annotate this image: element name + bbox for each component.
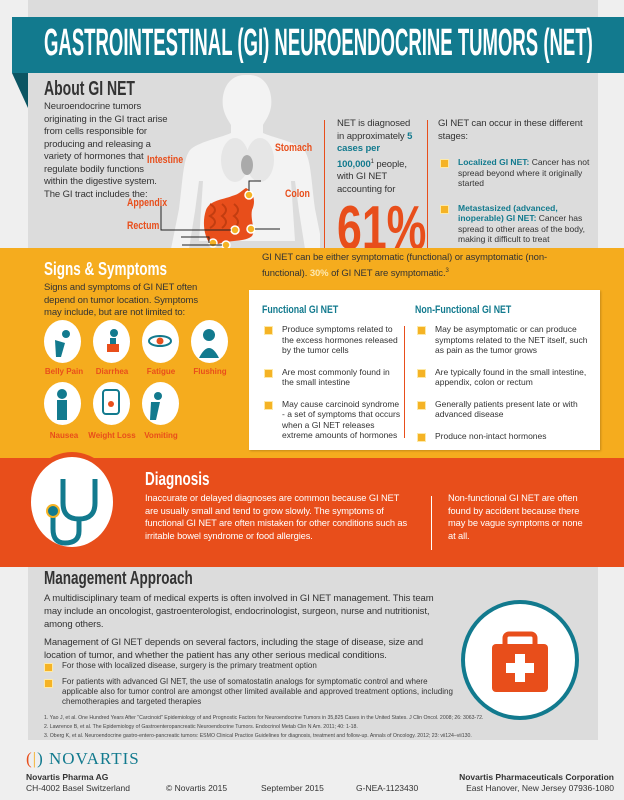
heading: about: About GI NET [44,78,135,100]
organ labels: Appendix [127,197,167,209]
footer: East Hanover, New Jersey 07936-1080 [466,783,614,793]
symptom icons: Belly Pain [45,367,83,376]
title banner [12,17,624,73]
divider lines [324,120,325,272]
references: 3. Oberg K, et al. Neuroendocrine gastro-entero-pancreatic tumors: ESMO Clinical Practice Guidelines for diagnosis, treatment and follow-up. Annals of Oncology. 2012; 23: vii124–vii130. [44,733,472,739]
column: functional [262,304,400,440]
footer: September 2015 [261,783,324,793]
heading: signs: Signs & Symptoms [44,259,167,279]
references [44,715,484,739]
references: 2. Lawrence B, et al. The Epidemiology of Gastroenteropancreatic Neuroendocrine Tumors. Endocrinol Metab Clin N Am. 2011; 40: 1-18. [44,724,358,730]
column: functional: May cause carcinoid syndrome - a set of symptoms that occurs when a GI NET releases extreme amounts of hormones [282,398,400,440]
organ labels [127,142,312,232]
stages: Metastasized (advanced, inoperable) GI NET: Cancer has spread to other areas of the body, making it difficult to treat [458,202,585,244]
column: functional: Functional GI NET [262,304,338,316]
panel: functional vs non-functional [249,290,600,450]
management bullets: For patients with advanced GI NET, the use of somatostatin analogs for symptomatic control and where applicable also for tumor control are amongst other limited available and approved treatment options, including chemotherapies and targeted therapies [62,677,453,706]
symptom icons: Nausea [50,431,78,440]
column: non-functional: Are typically found in the small intestine, appendix, colon or rectum [435,366,586,387]
symptom icons: Flushing [193,367,227,376]
stat: 61%: of NET diagnoses.2 [337,265,417,276]
organ labels: Intestine [147,154,183,166]
footer: Novartis Pharma AG [26,772,108,782]
organ labels: Rectum [127,220,159,232]
footer: Novartis Pharmaceuticals Corporation [459,772,614,782]
text: signs: Signs and symptoms of GI NET often depend on tumor location. Symptoms may include, but are not limited to: [44,282,198,318]
column: functional: Produce symptoms related to the excess hormones released by the tumor cells [282,324,398,355]
references: 1. Yao J, et al. One Hundred Years After "Carcinoid" Epidemiology of and Prognostic Factors for Neuroendocrine Tumors in 35,825 Cases in the United States. J Clin Oncol. 2008; 26: 3063-72. [44,715,484,721]
footer: G-NEA-1123430 [356,783,418,793]
title banner: GASTROINTESTINAL (GI) NEUROENDOCRINE TUMORS (NET) [44,22,593,64]
heading: diagnosis: Diagnosis [145,469,210,489]
organ labels: Stomach [275,142,312,154]
symptom icons: Vomiting [144,431,178,440]
signs & symptoms band [0,248,624,458]
stages: GI NET can occur in these different stages: [438,118,583,142]
symptom icons: Weight Loss [88,431,136,440]
heading: management: Management Approach [44,568,193,588]
diagnosis band [0,458,624,567]
text: about: Neuroendocrine tumors originating in the GI tract arise from cells responsible for producing and releasing a variety of hormones that regulate bodily functions within the digestive system. The GI tract includes the: [44,101,167,200]
organ labels: Colon [285,188,310,200]
stat: 61%: NET is diagnosed in approximately 5 cases per 100,0001 people, with GI NET accounting for [337,118,412,195]
column: non-functional: May be asymptomatic or can produce symptoms related to the NET itself, such as pain as the tumor grows [435,324,587,355]
stages: Localized GI NET: Cancer has not spread beyond where it originally started [458,157,589,188]
symptom icons: Diarrhea [96,367,128,376]
footer [26,772,614,793]
text: management: A multidisciplinary team of medical experts is often involved in GI NET management. This team may include an oncologist, gastroenterologist, endocrinologist, surgeon, nurse and nutritionist, among others. Management of GI NET depends on several factors, including the stage of disease, size and location of tumor, and whether the patient has any other serious medical conditions. [44,593,434,661]
column: functional: Are most commonly found in the small intestine [282,366,390,387]
symptom icons: Fatigue [147,367,175,376]
symptom icons [44,320,228,440]
icon: first aid kit [461,600,579,720]
column: non-functional: Non-Functional GI NET [415,304,511,316]
management bullets: For those with localized disease, surgery is the primary treatment option [62,661,317,670]
footer: CH-4002 Basel Switzerland [26,783,130,793]
text: non-functional diagnosis: Non-functional GI NET are often found by accident because there may be vague symptoms or none at all. [448,493,583,540]
body illustration [160,75,320,248]
column: non-functional: Produce non-intact hormones [435,430,547,440]
stages [438,118,590,244]
intro text: functional: GI NET can be either symptomatic (functional) or asymptomatic (non-functional). 30% of GI NET are symptomatic.3 [262,252,547,279]
footer: © Novartis 2015 [166,783,227,793]
column: non-functional [415,304,587,442]
logo: novartis: (|) NOVARTIS [26,749,140,768]
text: diagnosis: Inaccurate or delayed diagnoses are common because GI NET are usually small and tend to grow slowly. The symptoms of functional GI NET are often mistaken for other conditions such as irritable bowel syndrome or food allergies. [145,493,407,540]
stat: 61% [337,118,426,276]
stat: 61%: 61% [337,194,426,263]
banner fold [12,73,28,108]
icon: stethoscope [26,452,118,552]
column: non-functional: Generally patients present late or with advanced disease [435,398,578,419]
management bullets [44,661,453,706]
